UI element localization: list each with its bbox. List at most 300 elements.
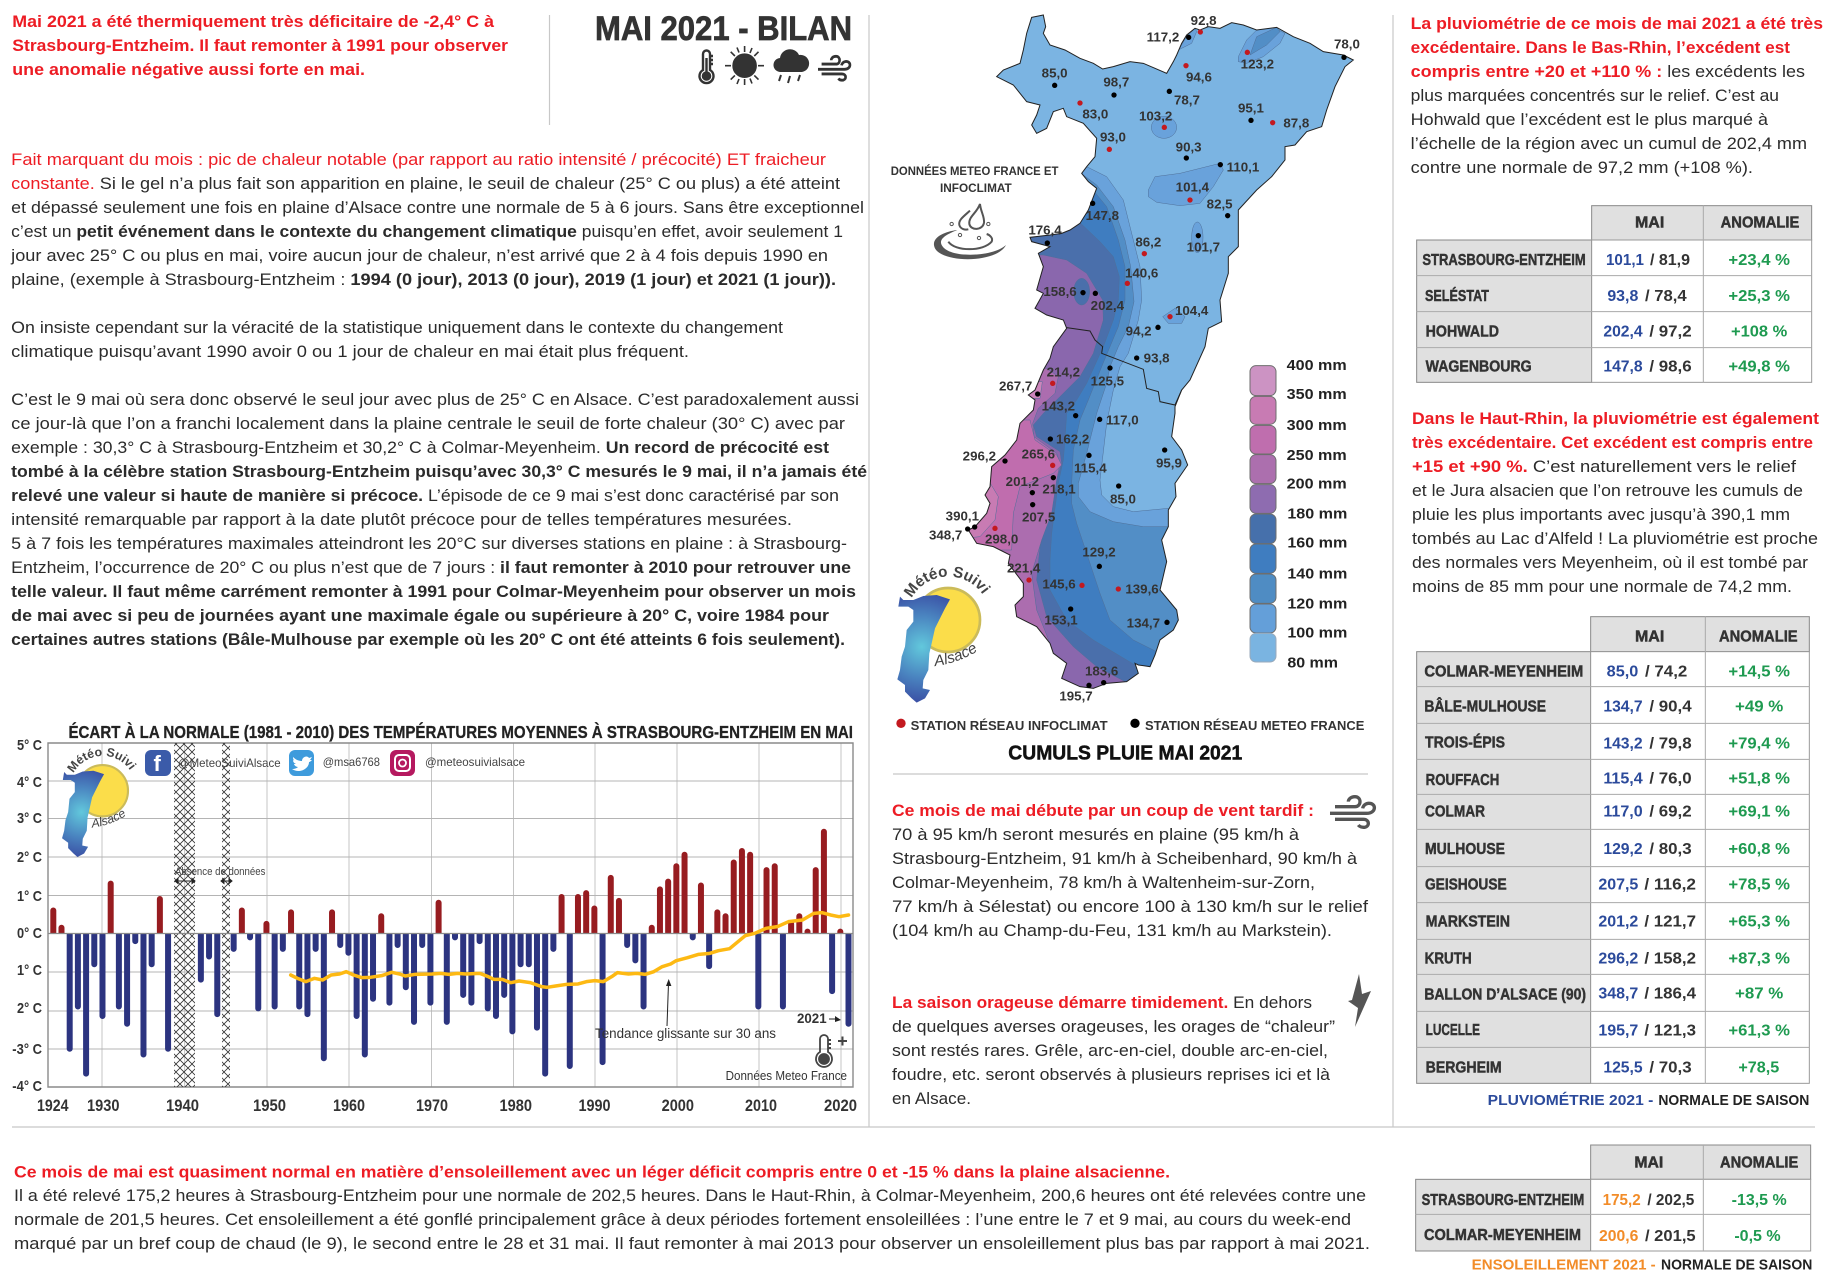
values: / 186,4 bbox=[1644, 985, 1697, 1002]
x axis labels: 1930 bbox=[87, 1096, 120, 1115]
values bbox=[1598, 664, 1697, 1076]
x axis labels: 1924 bbox=[37, 1096, 69, 1115]
station names bbox=[1422, 1192, 1584, 1244]
map legend: 80 mm bbox=[1287, 655, 1338, 671]
y axis labels: 0° C bbox=[17, 925, 42, 942]
station values: 85,0 bbox=[1110, 492, 1136, 507]
anomalies: +49 % bbox=[1735, 699, 1784, 716]
table header: MAI bbox=[1635, 215, 1664, 232]
social: facebook bbox=[145, 750, 281, 776]
station values: 162,2 bbox=[1056, 431, 1089, 446]
values: 201,2 bbox=[1598, 914, 1638, 931]
station values: 82,5 bbox=[1207, 196, 1233, 211]
values: / 116,2 bbox=[1644, 876, 1696, 893]
text block: pluviometrie Bas-Rhin: contre une normale de 97,2 mm (+108 %). bbox=[1411, 158, 1753, 177]
station legend: STATION RÉSEAU METEO FRANCE bbox=[1145, 718, 1364, 733]
x axis labels bbox=[37, 1096, 857, 1115]
map legend: 120 mm bbox=[1287, 596, 1347, 612]
station values: 78,7 bbox=[1174, 92, 1200, 107]
station values: 115,4 bbox=[1074, 461, 1107, 476]
values: / 80,3 bbox=[1649, 841, 1692, 858]
anomalies: -0,5 % bbox=[1734, 1228, 1781, 1245]
annotation: trend: Tendance glissante sur 30 ans bbox=[595, 1026, 776, 1041]
station values: 296,2 bbox=[963, 449, 996, 464]
anomalies: +78,5 bbox=[1738, 1059, 1780, 1076]
text block: ensoleillement bbox=[14, 1162, 1370, 1253]
station values: 267,7 bbox=[999, 379, 1032, 394]
trend line bbox=[291, 913, 849, 987]
station names: STRASBOURG-ENTZHEIM bbox=[1422, 1192, 1584, 1209]
text block: pluviometrie Haut-Rhin: pluie les plus importants avec jusqu’à 390,1 mm bbox=[1412, 505, 1790, 524]
station values: 117,2 bbox=[1147, 30, 1179, 45]
station values: 92,8 bbox=[1191, 13, 1217, 28]
map legend: 180 mm bbox=[1287, 506, 1347, 522]
values: / 70,3 bbox=[1649, 1059, 1692, 1076]
station values: 348,7 bbox=[929, 528, 962, 543]
rain contour bands bbox=[970, 28, 1286, 688]
intro callout: temperature deficit: Strasbourg-Entzheim. Il faut remonter à 1991 pour observer bbox=[12, 36, 508, 55]
text block: pluviometrie Haut-Rhin: tombés au Lac d’Alfeld ! La pluviométrie est proche bbox=[1412, 529, 1818, 548]
text block: fait marquant du mois: plaine, (exemple à Strasbourg-Entzheim : 1994 (0 jour), 2013 (0 jour), 2019 (1 jour) et 2021 (1 jour)). bbox=[11, 270, 836, 289]
station names: COLMAR-MEYENHEIM bbox=[1424, 664, 1583, 681]
station values: 140,6 bbox=[1125, 266, 1158, 281]
station values: 86,2 bbox=[1135, 235, 1161, 250]
map source note: DONNÉES METEO FRANCE ET bbox=[891, 163, 1059, 178]
text block: pluviometrie Bas-Rhin: compris entre +20 et +110 % : les excédents les bbox=[1411, 62, 1805, 81]
icon: thermometer plus bbox=[816, 1035, 847, 1067]
text block: coup de vent: Ce mois de mai débute par un coup de vent tardif : bbox=[892, 801, 1314, 820]
table caption: NORMALE DE SAISON bbox=[1658, 1092, 1809, 1109]
values: / 98,6 bbox=[1649, 359, 1692, 376]
logo: Meteo Suivi Alsace (large): Alsace bbox=[934, 645, 976, 666]
station values: 265,6 bbox=[1022, 447, 1055, 462]
x axis labels: 1950 bbox=[253, 1096, 286, 1115]
negative anomaly bars bbox=[70, 934, 849, 1074]
table header: ANOMALIE bbox=[1719, 629, 1798, 646]
station names: SELÉSTAT bbox=[1425, 286, 1489, 305]
table cells bbox=[1417, 206, 1812, 382]
station names: COLMAR-MEYENHEIM bbox=[1424, 1227, 1581, 1244]
social: instagram bbox=[390, 750, 525, 776]
text block: episode du 9 mai: exemple : 30,3° C à Strasbourg-Entzheim et 30,2° C à Colmar-Meyenheim. Un record de précocité est bbox=[11, 438, 829, 457]
values: 117,0 bbox=[1603, 804, 1643, 821]
station values: 298,0 bbox=[985, 532, 1018, 547]
y axis labels: 4° C bbox=[17, 774, 42, 791]
station values: 83,0 bbox=[1082, 107, 1108, 122]
map legend: 400 mm bbox=[1287, 358, 1347, 374]
text block: fait marquant du mois: c’est un petit événement dans le contexte du changement climatique puisqu’en effet, avoir seulement 1 bbox=[11, 222, 843, 241]
text block: episode du 9 mai: relevé une valeur si haute de manière si précoce. L’épisode de ce 9 mai s’est donc caractérisé par son bbox=[11, 486, 839, 505]
text block: pluviometrie Bas-Rhin: plus marquées concentrés sur le relief. C’est au bbox=[1411, 86, 1779, 105]
map legend: 200 mm bbox=[1287, 476, 1347, 492]
social: instagram: @meteosuivialsace bbox=[425, 755, 525, 769]
station legend bbox=[896, 718, 1364, 733]
station legend: STATION RÉSEAU INFOCLIMAT bbox=[911, 718, 1108, 733]
text block: episode du 9 mai: tombé à la célèbre station Strasbourg-Entzheim puisqu’avec 30,3° C mesurés le 9 mai, il n’a jamais été bbox=[11, 462, 867, 481]
text block: pluviometrie Bas-Rhin bbox=[1411, 14, 1823, 177]
station names: TROIS-ÉPIS bbox=[1425, 733, 1505, 752]
table header bbox=[1634, 1155, 1799, 1172]
table caption bbox=[1472, 1256, 1812, 1273]
x axis labels: 1940 bbox=[166, 1096, 199, 1115]
station names: GEISHOUSE bbox=[1425, 876, 1507, 893]
text block: pluviometrie Haut-Rhin: très excédentaire. Cet excédent est compris entre bbox=[1412, 433, 1813, 452]
values: 143,2 bbox=[1603, 735, 1643, 752]
station names: HOHWALD bbox=[1426, 324, 1499, 341]
y axis labels: 1° C bbox=[17, 888, 42, 905]
intro callout: temperature deficit bbox=[12, 12, 508, 79]
text block: coup de vent: Colmar-Meyenheim, 78 km/h à Waltenheim-sur-Zorn, bbox=[892, 873, 1315, 892]
table: ensoleillement bbox=[1416, 1145, 1812, 1273]
anomalies: +87 % bbox=[1735, 985, 1784, 1002]
text block: pluviometrie Haut-Rhin: et le Jura alsacien que l’on retrouve les cumuls de bbox=[1412, 481, 1803, 500]
text block: fait marquant du mois: et dépassé seulement une fois en plaine d’Alsace contre une normale de 5 à 6 jours. Sans être exceptionnel bbox=[11, 198, 864, 217]
y axis labels bbox=[12, 737, 42, 1095]
x axis labels: 2000 bbox=[662, 1096, 694, 1115]
table header: ANOMALIE bbox=[1720, 1155, 1799, 1172]
map legend: 160 mm bbox=[1287, 535, 1347, 551]
anomalies: +65,3 % bbox=[1728, 914, 1790, 931]
text block: episode du 9 mai: intensité remarquable par rapport à la date plutôt précoce pour de telles températures mesurées. bbox=[11, 510, 792, 529]
anomalies: +108 % bbox=[1731, 324, 1788, 341]
x axis labels: 2010 bbox=[745, 1096, 777, 1115]
station values: 93,8 bbox=[1144, 351, 1170, 366]
text block: pluviometrie Haut-Rhin: +15 et +90 %. C’est naturellement vers le relief bbox=[1412, 457, 1796, 476]
anomalies: +23,4 % bbox=[1728, 252, 1790, 269]
text block: ensoleillement: normale de 201,5 heures. Cet ensoleillement a été gonflé principalement grâce à deux périodes fortement ensoleillées : l’une entre le 7 et 9 mai, au cours du week-end bbox=[14, 1210, 1351, 1229]
social: facebook: @MeteoSuiviAlsace bbox=[178, 756, 281, 770]
text block: saison orageuse: sont restés rares. Grêle, arc-en-ciel, double arc-en-ciel, bbox=[892, 1041, 1328, 1060]
map legend: 100 mm bbox=[1287, 625, 1347, 641]
icon: lightning bbox=[1348, 974, 1371, 1027]
station names: ROUFFACH bbox=[1426, 772, 1499, 789]
stations: Meteo France (black) bbox=[965, 35, 1347, 688]
source note: Données Meteo France bbox=[726, 1068, 847, 1083]
text block: coup de vent: 70 à 95 km/h seront mesurés en plaine (95 km/h à bbox=[892, 825, 1300, 844]
text block: statistique: climatique puisqu’avant 1990 avoir 0 ou 1 jour de chaleur en mai était plus fréquent. bbox=[11, 342, 689, 361]
station values: 153,1 bbox=[1044, 613, 1078, 628]
values: 85,0 bbox=[1607, 664, 1638, 681]
y axis labels: 3° C bbox=[17, 810, 42, 827]
chart: temperature anomaly Strasbourg-Entzheim bbox=[12, 721, 857, 1115]
values: / 201,5 bbox=[1645, 1228, 1696, 1245]
values: 93,8 bbox=[1607, 288, 1639, 305]
table caption bbox=[1488, 1092, 1809, 1109]
values: 101,1 bbox=[1606, 252, 1644, 269]
text block: episode du 9 mai: 5 à 7 fois les températures maximales atteindront les 20°C sur diverses stations en plaine : à Strasbourg- bbox=[11, 534, 847, 553]
station values: 101,4 bbox=[1176, 180, 1210, 195]
departmental border bbox=[1067, 328, 1182, 405]
values: / 202,5 bbox=[1647, 1192, 1695, 1209]
station values: 94,6 bbox=[1186, 70, 1212, 85]
x axis labels: 1990 bbox=[578, 1096, 610, 1115]
annotation: 2021: 2021 bbox=[797, 1011, 827, 1026]
table header: MAI bbox=[1634, 1155, 1663, 1172]
table header bbox=[1635, 215, 1800, 232]
station values: 390,1 bbox=[946, 509, 980, 524]
map legend: 300 mm bbox=[1287, 418, 1347, 434]
station values bbox=[929, 13, 1360, 704]
values: 147,8 bbox=[1603, 359, 1643, 376]
station values: 87,8 bbox=[1283, 116, 1309, 131]
text block: episode du 9 mai: de mai avec si peu de journées ayant une maximale égale ou supérieure à 20° C, voire 1984 pour bbox=[11, 606, 829, 625]
text block: pluviometrie Haut-Rhin: moins de 85 mm pour une normale de 74,2 mm. bbox=[1412, 577, 1792, 596]
anomalies: +69,1 % bbox=[1728, 804, 1790, 821]
logo: Meteo Suivi Alsace (small): Alsace bbox=[92, 810, 125, 828]
table header bbox=[1635, 629, 1798, 646]
station names: BÂLE-MULHOUSE bbox=[1424, 697, 1546, 716]
values: 296,2 bbox=[1598, 950, 1638, 967]
station values: 117,0 bbox=[1106, 413, 1139, 428]
values: 348,7 bbox=[1598, 985, 1638, 1002]
text block: coup de vent: Strasbourg-Entzheim, 91 km/h à Scheibenhard, 90 km/h à bbox=[892, 849, 1358, 868]
map source note: INFOCLIMAT bbox=[940, 181, 1012, 195]
icon: water drop and ripples bbox=[934, 204, 1006, 259]
station values: 207,5 bbox=[1022, 510, 1056, 525]
icon: thermometer bbox=[700, 50, 714, 83]
station values: 85,0 bbox=[1042, 66, 1068, 81]
y axis labels: 1° C bbox=[17, 962, 42, 979]
station names bbox=[1422, 252, 1586, 376]
anomalies: +51,8 % bbox=[1728, 770, 1790, 787]
anomalies: -13,5 % bbox=[1732, 1192, 1787, 1209]
station values: 94,2 bbox=[1126, 324, 1152, 339]
values: / 74,2 bbox=[1645, 664, 1687, 681]
text block: statistique: On insiste cependant sur la véracité de la statistique uniquement dans le contexte du changement bbox=[11, 318, 783, 337]
map legend: 250 mm bbox=[1287, 448, 1347, 464]
text block: episode du 9 mai bbox=[11, 390, 867, 649]
anomalies: +49,8 % bbox=[1728, 359, 1790, 376]
values: / 81,9 bbox=[1650, 252, 1690, 269]
station values: 129,2 bbox=[1082, 545, 1116, 560]
station values: 125,5 bbox=[1091, 374, 1125, 389]
anomalies bbox=[1728, 664, 1790, 1076]
positive anomaly bars bbox=[53, 832, 840, 934]
station values: 134,7 bbox=[1127, 616, 1160, 631]
x axis labels: 1960 bbox=[333, 1096, 365, 1115]
station values: 139,6 bbox=[1125, 581, 1159, 596]
social: facebook: f bbox=[154, 751, 162, 776]
values: 175,2 bbox=[1603, 1192, 1641, 1209]
values: 115,4 bbox=[1603, 770, 1643, 787]
text block: fait marquant du mois: jour avec 25° C ou plus en mai, voire aucun jour de chaleur, n’est arrivé que 2 à 4 fois depuis 1990 en bbox=[10, 246, 828, 265]
values: 202,4 bbox=[1603, 324, 1643, 341]
station values: 143,2 bbox=[1042, 399, 1075, 414]
station values: 145,6 bbox=[1042, 577, 1076, 592]
table caption: NORMALE DE SAISON bbox=[1661, 1256, 1812, 1273]
station values: 176,4 bbox=[1028, 223, 1062, 238]
map source note bbox=[891, 163, 1059, 195]
station names: STRASBOURG-ENTZHEIM bbox=[1422, 252, 1586, 269]
map: cumuls de pluie mai 2021 bbox=[929, 13, 1360, 733]
anomalies bbox=[1728, 252, 1790, 376]
text block: saison orageuse: La saison orageuse démarre timidement. En dehors bbox=[892, 993, 1312, 1012]
text block: pluviometrie Bas-Rhin: l’échelle de la région avec un cumul de 202,4 mm bbox=[1411, 134, 1807, 153]
station names: MARKSTEIN bbox=[1426, 914, 1510, 931]
text block: ensoleillement: Il a été relevé 175,2 heures à Strasbourg-Entzheim pour une normale de 202,5 heures. Dans le Haut-Rhin, à Colmar-Meyenheim, 200,6 heures ont été relevées contre une bbox=[14, 1186, 1366, 1205]
values bbox=[1603, 252, 1692, 376]
text block: saison orageuse: de quelques averses orageuses, les orages de “chaleur” bbox=[892, 1017, 1335, 1036]
values: 195,7 bbox=[1598, 1023, 1638, 1040]
annotation: 2021 bbox=[797, 1011, 841, 1026]
station values: 93,0 bbox=[1100, 130, 1126, 145]
logo: Meteo Suivi Alsace (large) bbox=[897, 566, 991, 703]
hatched no-data bands bbox=[174, 743, 230, 1087]
table: pluviometrie Haut-Rhin bbox=[1417, 617, 1809, 1109]
text block: episode du 9 mai: telle valeur. Il faut même carrément remonter à 1991 pour Colmar-Meyenheim pour observer un mois bbox=[11, 582, 856, 601]
station values: 218,1 bbox=[1042, 482, 1076, 497]
table: pluviometrie Bas-Rhin bbox=[1417, 206, 1812, 382]
x axis labels: 1980 bbox=[500, 1096, 532, 1115]
text block: pluviometrie Bas-Rhin: Hohwald que l’excédent est le plus marqué à bbox=[1411, 110, 1769, 129]
text block: pluviometrie Haut-Rhin: des normales vers Meyenheim, où il est tombé par bbox=[1412, 553, 1808, 572]
station values: 221,4 bbox=[1007, 561, 1041, 576]
logo: Meteo Suivi Alsace (small): Météo Suivi bbox=[67, 748, 137, 772]
table cells bbox=[1417, 617, 1809, 1083]
values: / 97,2 bbox=[1649, 324, 1692, 341]
values: / 76,0 bbox=[1649, 770, 1692, 787]
station values: 95,1 bbox=[1238, 101, 1265, 116]
station values: 78,0 bbox=[1334, 36, 1360, 51]
text block: pluviometrie Haut-Rhin bbox=[1412, 409, 1819, 596]
text block: episode du 9 mai: certaines autres stations (Bâle-Mulhouse par exemple où les 20° C ont été atteints 6 fois seulement). bbox=[11, 630, 845, 649]
text block: saison orageuse: foudre, etc. seront observés à plusieurs reprises ici et là bbox=[892, 1065, 1331, 1084]
values: / 121,3 bbox=[1644, 1023, 1696, 1040]
annotation: absence de donnees bbox=[175, 866, 266, 884]
map legend: 350 mm bbox=[1287, 387, 1347, 403]
logo: Meteo Suivi Alsace (large): Météo Suivi bbox=[904, 566, 991, 598]
station values: 98,7 bbox=[1103, 75, 1129, 90]
y axis labels: -4° C bbox=[12, 1078, 42, 1095]
anomalies: +25,3 % bbox=[1728, 288, 1790, 305]
station names bbox=[1424, 664, 1586, 1076]
y axis labels: -3° C bbox=[12, 1041, 42, 1058]
values: / 158,2 bbox=[1644, 950, 1696, 967]
map legend bbox=[1250, 358, 1347, 671]
table caption: PLUVIOMÉTRIE 2021 - bbox=[1488, 1092, 1653, 1109]
map base bbox=[968, 15, 1353, 688]
anomalies: +60,8 % bbox=[1728, 841, 1790, 858]
station values: 90,3 bbox=[1176, 140, 1202, 155]
station values: 104,4 bbox=[1175, 303, 1209, 318]
station values: 103,2 bbox=[1139, 109, 1172, 124]
values: 200,6 bbox=[1599, 1228, 1638, 1245]
anomalies bbox=[1732, 1192, 1787, 1245]
text block: fait marquant du mois: constante. Si le gel n’a plus fait son apparition en plaine, le seuil de chaleur (25° C ou plus) a été atteint bbox=[11, 174, 840, 193]
station values: 95,9 bbox=[1156, 455, 1182, 470]
station values: 214,2 bbox=[1047, 365, 1080, 380]
text block: pluviometrie Haut-Rhin: Dans le Haut-Rhin, la pluviométrie est également bbox=[1412, 409, 1819, 428]
station values: 147,8 bbox=[1086, 208, 1119, 223]
text block: pluviometrie Bas-Rhin: La pluviométrie de ce mois de mai 2021 a été très bbox=[1411, 14, 1823, 33]
anomalies: +79,4 % bbox=[1728, 735, 1790, 752]
table caption: ENSOLEILLEMENT 2021 - bbox=[1472, 1256, 1656, 1273]
station names: MULHOUSE bbox=[1425, 841, 1505, 858]
values: / 78,4 bbox=[1645, 288, 1687, 305]
icon: wind bbox=[1330, 797, 1374, 827]
icon: sun bbox=[725, 46, 764, 85]
plot frame bbox=[48, 743, 853, 1087]
map legend: 140 mm bbox=[1287, 566, 1347, 582]
text block: pluviometrie Bas-Rhin: excédentaire. Dans le Bas-Rhin, l’excédent est bbox=[1411, 38, 1790, 57]
text block: saison orageuse: en Alsace. bbox=[892, 1089, 971, 1108]
logo: Meteo Suivi Alsace (small) bbox=[62, 748, 137, 857]
text block: episode du 9 mai: ce jour-là que l’on a franchi localement dans la plaine centrale le seuil de forte chaleur (30° C) avec par bbox=[11, 414, 845, 433]
station names: WAGENBOURG bbox=[1426, 359, 1532, 376]
values: 129,2 bbox=[1603, 841, 1643, 858]
intro callout: temperature deficit: une anomalie négative aussi forte en mai. bbox=[12, 60, 365, 79]
station values: 110,1 bbox=[1227, 160, 1260, 175]
anomalies: +78,5 % bbox=[1728, 876, 1790, 893]
values: / 79,8 bbox=[1649, 735, 1692, 752]
text block: ensoleillement: Ce mois de mai est quasiment normal en matière d’ensoleillement avec un léger déficit compris entre 0 et -15 % dans la plaine alsacienne. bbox=[14, 1162, 1170, 1182]
station values: 158,6 bbox=[1043, 284, 1077, 299]
icon: rain cloud bbox=[773, 49, 809, 83]
y axis labels: 5° C bbox=[17, 737, 42, 754]
text block: fait marquant du mois: Fait marquant du mois : pic de chaleur notable (par rapport au ratio intensité / précocité) ET fraicheur bbox=[11, 150, 826, 169]
map title: CUMULS PLUIE MAI 2021 bbox=[1008, 741, 1242, 764]
text block: saison orageuse bbox=[892, 993, 1335, 1108]
station values: 195,7 bbox=[1059, 689, 1093, 704]
chart title: ÉCART À LA NORMALE (1981 - 2010) DES TEMPÉRATURES MOYENNES À STRASBOURG-ENTZHEIM EN MAI bbox=[68, 721, 853, 742]
station names: LUCELLE bbox=[1426, 1022, 1480, 1039]
station values: 183,6 bbox=[1085, 664, 1118, 679]
text block: ensoleillement: marqué par un bref coup de chaud (le 9), le second entre le 28 et 31 mai. Il faut remonter à mai 2013 pour observer un ensoleillement plus bas par rapport à mai 2021. bbox=[14, 1234, 1370, 1253]
text block: coup de vent bbox=[892, 801, 1368, 940]
text block: episode du 9 mai: C’est le 9 mai où sera donc observé le seul jour avec plus de 25° C en Alsace. C’est paradoxalement aussi bbox=[11, 390, 859, 409]
y axis labels: 2° C bbox=[17, 1000, 42, 1017]
text block: fait marquant du mois bbox=[10, 150, 864, 289]
station names: BERGHEIM bbox=[1426, 1059, 1502, 1076]
station values: 123,2 bbox=[1241, 56, 1274, 71]
icon: wind bbox=[818, 56, 850, 80]
table header: ANOMALIE bbox=[1721, 215, 1800, 232]
title: MAI 2021 - BILAN bbox=[595, 10, 852, 48]
station names: KRUTH bbox=[1425, 950, 1472, 967]
station names: COLMAR bbox=[1425, 804, 1485, 821]
intro callout: temperature deficit: Mai 2021 a été thermiquement très déficitaire de -2,4° C à bbox=[12, 12, 495, 31]
text block: statistique bbox=[11, 318, 783, 361]
station values: 201,2 bbox=[1006, 474, 1039, 489]
text block: coup de vent: 77 km/h à Sélestat) ou encore 100 à 130 km/h sur le relief bbox=[892, 897, 1368, 916]
stations: Infoclimat (red) bbox=[992, 29, 1275, 592]
text block: episode du 9 mai: Entzheim, l’occurrence de 20° C ou plus n’est que de 7 jours : il faut remonter à 2010 pour retrouver une bbox=[11, 558, 851, 577]
station values: 101,7 bbox=[1187, 240, 1220, 255]
annotation: absence de donnees: Absence de données bbox=[175, 866, 266, 878]
station names: BALLON D’ALSACE (90) bbox=[1424, 986, 1586, 1003]
values bbox=[1599, 1192, 1696, 1245]
values: / 90,4 bbox=[1649, 699, 1692, 716]
x axis labels: 1970 bbox=[416, 1096, 448, 1115]
social: twitter: @msa6768 bbox=[323, 755, 380, 769]
table header: MAI bbox=[1635, 629, 1664, 646]
text block: coup de vent: (104 km/h au Champ-du-Feu, 131 km/h au Markstein). bbox=[892, 921, 1332, 940]
x axis labels: 2020 bbox=[824, 1096, 857, 1115]
station values: 202,4 bbox=[1091, 298, 1125, 313]
annotation: trend bbox=[595, 979, 776, 1041]
anomalies: +14,5 % bbox=[1728, 664, 1790, 681]
anomalies: +61,3 % bbox=[1728, 1023, 1790, 1040]
map outline bbox=[968, 15, 1353, 688]
social: twitter bbox=[289, 750, 380, 776]
y axis labels: 2° C bbox=[17, 849, 42, 866]
values: 207,5 bbox=[1598, 876, 1639, 893]
table cells bbox=[1416, 1145, 1811, 1251]
anomalies: +87,3 % bbox=[1728, 950, 1790, 967]
values: 134,7 bbox=[1603, 699, 1643, 716]
values: / 121,7 bbox=[1644, 914, 1696, 931]
values: / 69,2 bbox=[1649, 804, 1692, 821]
